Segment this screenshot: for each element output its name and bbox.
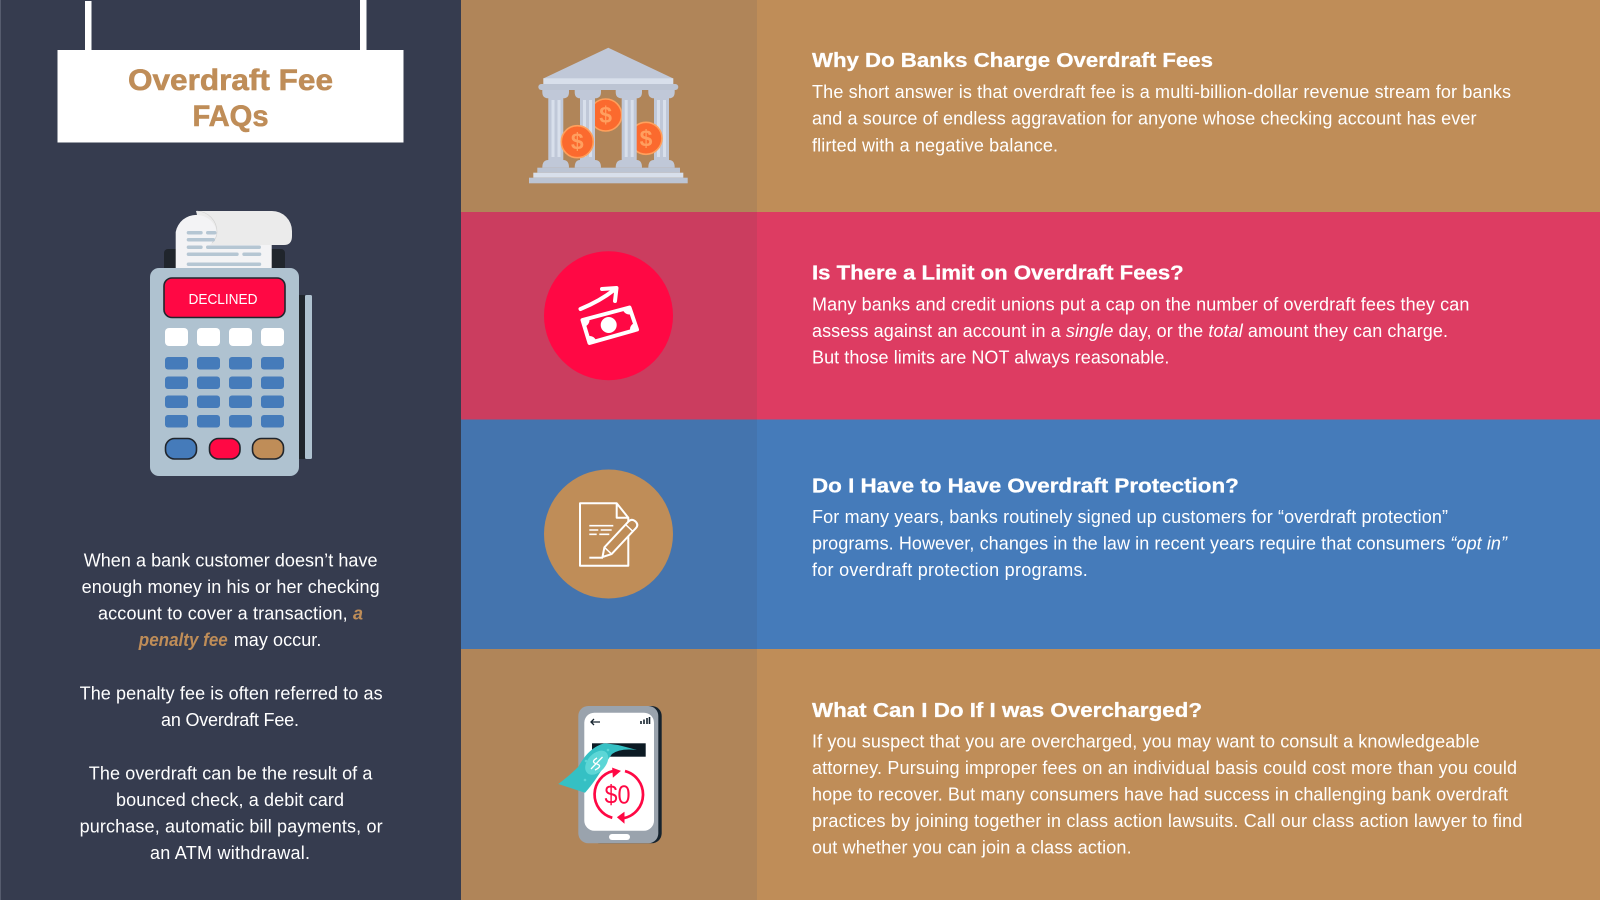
text block: overcharged: hope to recover. But many consumers have had success in challenging bank overdraft (812, 784, 1508, 804)
panel: why banks charge fees (461, 0, 1600, 212)
text block: overdraft definition: an ATM withdrawal. (150, 843, 310, 863)
icon: phone with zero balance and refund: $0 (604, 779, 630, 809)
text block: overdraft protection: Do I Have to Have Overdraft Protection? (812, 475, 1239, 497)
text block: overcharged: attorney. Pursuing improper fees on an individual basis could cost more than you could (812, 758, 1517, 778)
text block: overdraft definition: may occur. (234, 630, 321, 650)
text block: overdraft definition: enough money in his or her checking (82, 577, 380, 597)
text block: overdraft definition: penalty fee (138, 630, 228, 650)
text block: limit on overdraft fees: Is There a Limit on Overdraft Fees? (812, 262, 1184, 284)
text block: limit on overdraft fees: assess against an account in a single day, or the total amount they can charge. (812, 321, 1448, 341)
icon: bank with coins: $ (599, 102, 612, 128)
title (128, 64, 333, 133)
text block: overcharged (812, 700, 1522, 858)
text block: overdraft definition: account to cover a transaction, a (98, 604, 363, 624)
title: Overdraft Fee (128, 64, 333, 97)
text block: overcharged: out whether you can join a class action. (812, 838, 1132, 858)
panel: left sidebar (0, 0, 461, 900)
text block: overdraft definition: bounced check, a debit card (116, 790, 344, 810)
text block: overcharged: If you suspect that you are overcharged, you may want to consult a knowledgeable (812, 731, 1480, 751)
panel: overcharged (461, 649, 1600, 900)
text block: overdraft definition: an Overdraft Fee. (161, 710, 299, 730)
icon: card payment terminal showing declined (150, 211, 312, 476)
text block: why banks charge fees: Why Do Banks Charge Overdraft Fees (812, 50, 1213, 72)
text block: overdraft protection: For many years, banks routinely signed up customers for “overdraft protection” (812, 507, 1448, 527)
icon: bank with coins: $ (571, 129, 584, 155)
text block: overcharged: What Can I Do If I was Overcharged? (812, 700, 1202, 722)
icon: card payment terminal showing declined: DECLINED (188, 292, 258, 308)
panel: overdraft protection (461, 420, 1600, 649)
text block: overdraft definition (80, 550, 383, 863)
text block: overdraft protection: programs. However, changes in the law in recent years require that consumers “opt in” (812, 534, 1508, 554)
text block: why banks charge fees: The short answer is that overdraft fee is a multi-billion-dollar revenue stream for banks (812, 82, 1511, 102)
panel: limit on overdraft fees (461, 212, 1600, 420)
text block: why banks charge fees: flirted with a negative balance. (812, 135, 1058, 155)
text block: limit on overdraft fees: But those limits are NOT always reasonable. (812, 348, 1169, 368)
text block: overdraft definition: When a bank customer doesn’t have (84, 550, 377, 570)
icon: money with rising arrow (544, 251, 673, 380)
title: FAQs (192, 100, 268, 133)
icon: bank with coins (529, 48, 688, 183)
icon: phone with zero balance and refund (558, 706, 662, 843)
icon: signed document (544, 470, 673, 598)
text block: overdraft definition: The overdraft can be the result of a (89, 764, 373, 784)
text block: overdraft protection (812, 475, 1508, 580)
icon: bank with coins: $ (640, 125, 653, 151)
sign: hanging title board (58, 0, 404, 142)
text block: limit on overdraft fees: Many banks and credit unions put a cap on the number of overdraft fees they can (812, 294, 1469, 314)
text block: why banks charge fees: and a source of endless aggravation for anyone whose checking account has ever (812, 109, 1476, 129)
text block: overcharged: practices by joining together in class action lawsuits. Call our class action lawyer to find (812, 811, 1522, 831)
text block: why banks charge fees (812, 50, 1511, 155)
text block: overdraft definition: purchase, automatic bill payments, or (80, 816, 383, 836)
text block: overdraft protection: for overdraft protection programs. (812, 560, 1088, 580)
text block: limit on overdraft fees (812, 262, 1469, 368)
text block: overdraft definition: The penalty fee is often referred to as (80, 684, 383, 704)
